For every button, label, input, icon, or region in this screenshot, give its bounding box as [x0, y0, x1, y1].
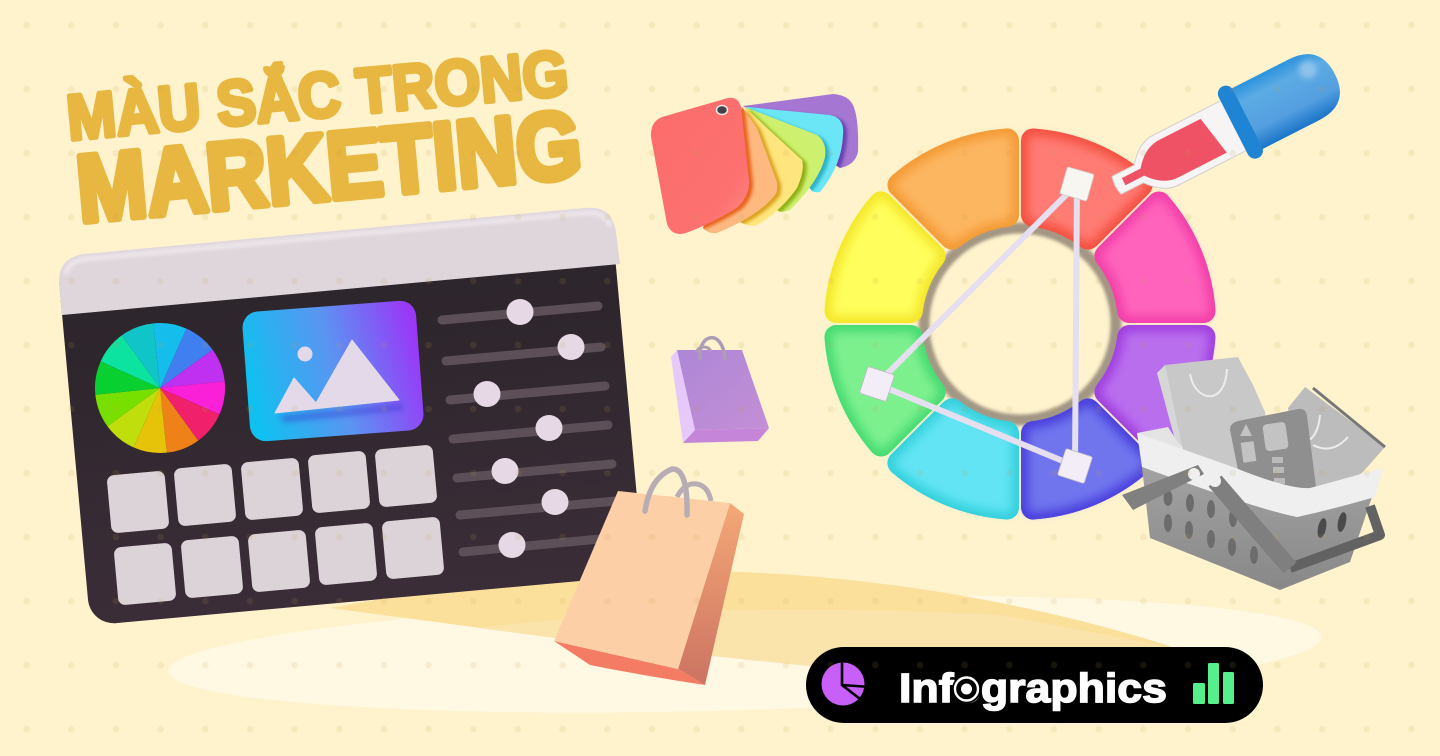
- basket body: [1142, 467, 1372, 590]
- window body: [57, 209, 644, 625]
- brand text: Infographics: [899, 665, 1167, 711]
- window title bar: [59, 208, 620, 315]
- ground shadow: golden band: [330, 572, 1175, 680]
- title: [64, 36, 586, 243]
- image card: [241, 300, 425, 442]
- ground shadow: light ellipse: [167, 581, 1323, 727]
- icon: purple shopping bag: [671, 338, 769, 443]
- front handles: [1122, 465, 1290, 568]
- icon: color swatch fan: [651, 94, 858, 235]
- badge: Infographics pill: [806, 647, 1263, 723]
- right handle: [1290, 506, 1380, 568]
- segment: yellow: [836, 203, 934, 311]
- bags in basket: [1157, 357, 1385, 495]
- swatch buttons: [106, 444, 445, 606]
- segment: blue: [996, 394, 1141, 539]
- icon: target letter o: [952, 674, 981, 704]
- sliders: [442, 306, 616, 552]
- title: MARKETING: [72, 91, 586, 243]
- segment: pink: [1090, 203, 1235, 348]
- basket rim: [1137, 433, 1383, 517]
- icon: green bars: [1193, 663, 1234, 704]
- slider knobs: [474, 299, 584, 558]
- icon: peach shopping bag: [554, 469, 744, 685]
- icon: color dropper: [1097, 38, 1353, 222]
- triangle harmony selector: [859, 167, 1094, 484]
- icon: purple pie chart: [822, 660, 870, 706]
- segment: cyan: [899, 410, 1007, 508]
- inner ring shadow: [924, 228, 1116, 420]
- title: MÀU SẮC TRONG: [64, 36, 571, 154]
- segment: red: [1033, 140, 1141, 238]
- basket holes: [1164, 490, 1348, 564]
- icon: grey shopping basket: [1122, 357, 1385, 590]
- segment: orange: [899, 109, 1044, 254]
- panel: app window: [57, 208, 644, 625]
- segment: purple: [1106, 337, 1204, 445]
- color ring: [805, 109, 1235, 539]
- color wheel: [80, 308, 240, 468]
- segment: green: [805, 300, 950, 445]
- basket back rim: [1137, 427, 1183, 450]
